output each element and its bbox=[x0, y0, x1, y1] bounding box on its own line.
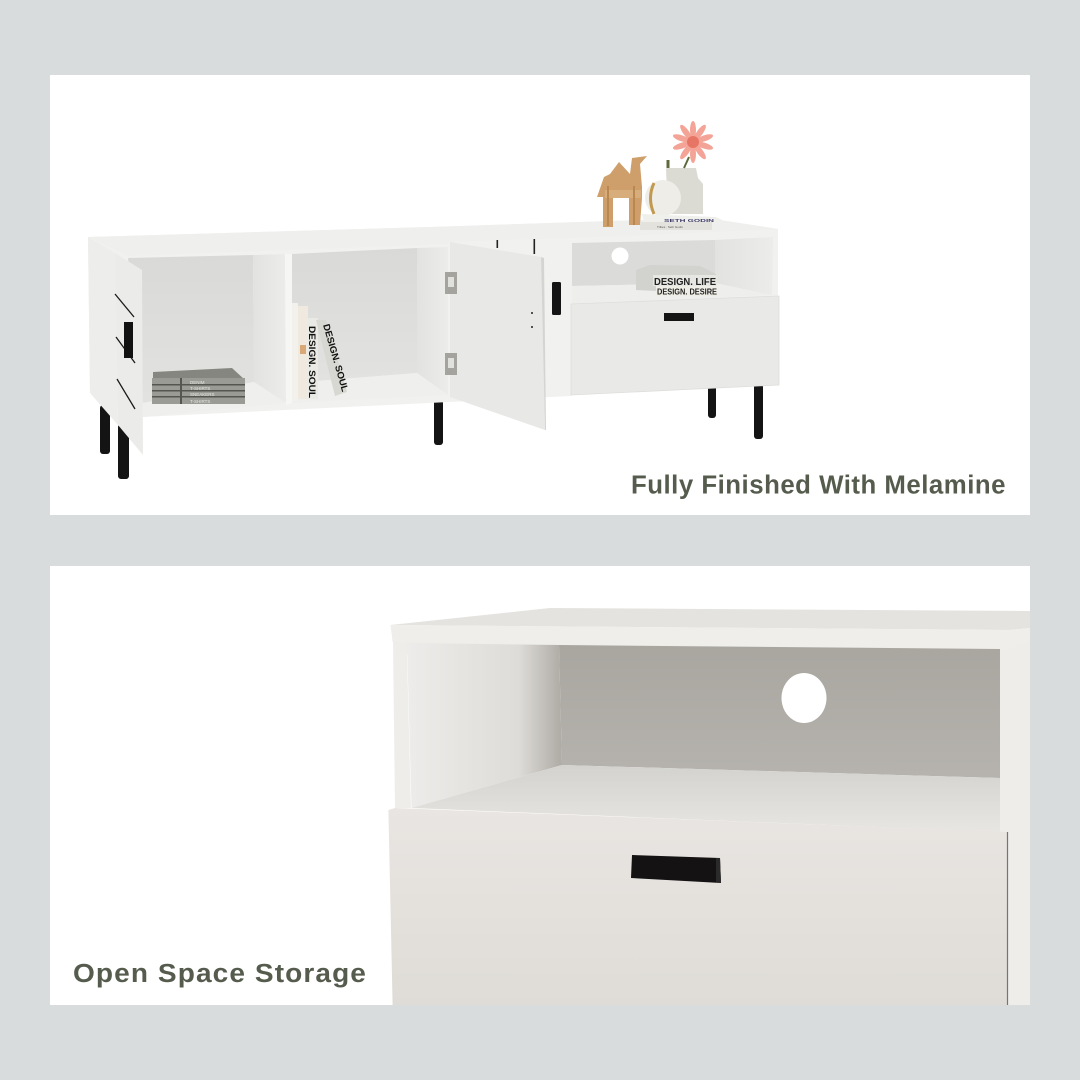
decor: books on top: SETH GODIN bbox=[664, 218, 714, 223]
decor: vase with flower bbox=[666, 121, 714, 214]
decor: books on top bbox=[640, 214, 722, 230]
black legs bbox=[100, 384, 763, 479]
close-up cable hole bbox=[782, 673, 826, 723]
close-up cabinet side frame bbox=[393, 640, 1030, 1005]
books in niche: DESIGN. LIFE bbox=[654, 276, 716, 288]
decor: white ball bbox=[645, 180, 681, 216]
drawer side gap bbox=[1006, 832, 1008, 1005]
standing books, right compartment: DESIGN. SOUL bbox=[306, 326, 317, 398]
panel: full cabinet view bbox=[50, 75, 1030, 515]
close-up front edge bbox=[390, 625, 1030, 649]
center side handle bbox=[552, 282, 561, 315]
close-up drawer handle bbox=[631, 855, 721, 883]
stacked books, left compartment: SNEAKERS bbox=[190, 392, 215, 397]
decor: wooden camel bbox=[597, 156, 647, 227]
close-up top surface bbox=[390, 608, 1030, 630]
open left door bbox=[115, 253, 143, 455]
left compartment bbox=[128, 254, 286, 417]
panel: open space close-up bbox=[50, 566, 1030, 1005]
right compartment bbox=[292, 247, 448, 403]
books in niche bbox=[636, 265, 718, 296]
decor: books on top: Tribes · Seth Godin bbox=[657, 225, 683, 229]
slots and pegs bbox=[496, 239, 535, 328]
caption: storage: Open Space Storage bbox=[73, 960, 367, 988]
close-up niche left wall bbox=[407, 643, 562, 808]
cabinet body bbox=[88, 218, 778, 425]
stacked books, left compartment: DENIM bbox=[190, 380, 205, 385]
stacked books, left compartment: T-SHIRTS bbox=[190, 386, 210, 391]
cable hole bbox=[612, 248, 628, 264]
stacked books, left compartment: T-SHIRTS bbox=[190, 399, 210, 404]
close-up drawer bbox=[388, 808, 1007, 1005]
open right door bbox=[445, 242, 546, 430]
flower bbox=[672, 121, 714, 163]
drawer handle bbox=[664, 313, 694, 321]
hinges bbox=[445, 272, 457, 375]
caption: melamine: Fully Finished With Melamine bbox=[631, 472, 1006, 500]
divider bbox=[285, 254, 292, 405]
drawer bbox=[571, 296, 779, 395]
upper open niche bbox=[572, 237, 773, 304]
close-up niche back wall bbox=[559, 645, 1000, 778]
stacked books, left compartment bbox=[152, 368, 245, 404]
books in niche: DESIGN. DESIRE bbox=[657, 286, 717, 296]
close-up shelf bbox=[412, 765, 1000, 832]
standing books, right compartment bbox=[292, 303, 350, 401]
left door handle bbox=[124, 322, 133, 358]
standing books, right compartment: DESIGN. SOUL bbox=[320, 323, 350, 393]
